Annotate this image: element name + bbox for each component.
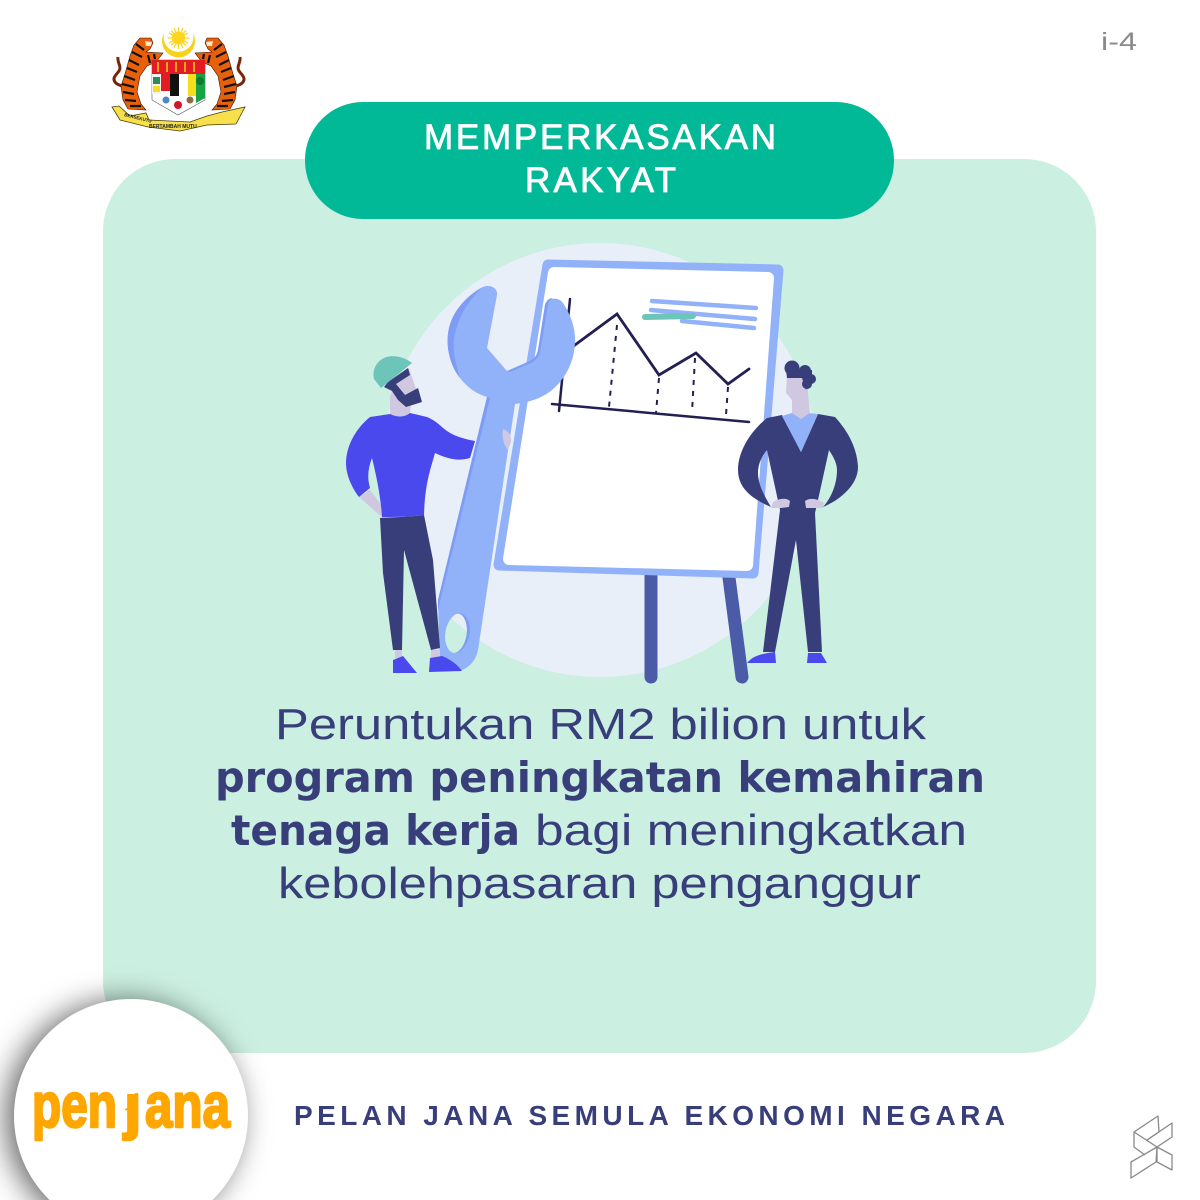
- worker neck and face: [390, 368, 418, 418]
- penjana logo: ana: [145, 1071, 231, 1141]
- background panel: [103, 159, 1096, 1053]
- worker ankles: [395, 650, 439, 658]
- crest crescent and sun: [162, 27, 195, 57]
- footer tagline: PELAN JANA SEMULA EKONOMI NEGARA: [294, 1100, 1005, 1131]
- easel legs: [651, 570, 742, 677]
- presenter shoes: [747, 652, 827, 663]
- presenter face: [786, 375, 810, 420]
- coat of arms: [112, 27, 245, 131]
- presenter hands: [771, 499, 824, 508]
- backdrop circle: [383, 243, 817, 677]
- crest ribbon: BERSEKUTU: [124, 112, 152, 124]
- crest right tiger: [195, 38, 244, 110]
- board sheet: [509, 273, 768, 565]
- logo circle: [14, 999, 248, 1200]
- worker hand: [502, 429, 511, 450]
- heading text: MEMPERKASAKAN: [424, 118, 776, 157]
- heading text: RAKYAT: [525, 161, 676, 200]
- penjana logo: pen: [32, 1071, 117, 1141]
- worker shirt: [346, 413, 475, 517]
- line chart: [552, 299, 749, 422]
- page number: i-4: [1101, 28, 1137, 56]
- main text: program peningkatan kemahiran: [215, 753, 985, 802]
- crest ribbon: BERTAMBAH MUTU: [149, 124, 197, 130]
- worker hair and beard: [384, 368, 422, 407]
- crest left tiger: [114, 38, 163, 110]
- penjana logo: [32, 1068, 231, 1141]
- presenter hair: [784, 360, 816, 390]
- wrench: [438, 286, 575, 670]
- presenter collar: [782, 413, 818, 452]
- heading text: [424, 118, 776, 200]
- illustration: [346, 243, 858, 677]
- heading pill: [305, 102, 894, 219]
- main text: tenaga kerja: [231, 806, 520, 855]
- presenter man: [738, 360, 858, 663]
- chart legend bars: [645, 301, 756, 328]
- main text: kebolehpasaran penganggur: [278, 859, 921, 908]
- presenter suit: [738, 414, 858, 652]
- main text: [215, 700, 985, 908]
- penjana logo: j: [123, 1071, 142, 1141]
- main text: bagi meningkatkan: [535, 806, 967, 855]
- worker arm skin: [359, 490, 383, 518]
- crest ribbon: [112, 106, 245, 131]
- main text: Peruntukan RM2 bilion untuk: [275, 700, 927, 749]
- brand mark: [1131, 1116, 1172, 1178]
- board frame: [499, 265, 778, 573]
- worker helmet: [373, 356, 412, 388]
- worker shoes: [393, 656, 462, 673]
- crest shield: [152, 60, 205, 115]
- worker pants: [380, 515, 440, 650]
- worker with helmet: [346, 356, 511, 673]
